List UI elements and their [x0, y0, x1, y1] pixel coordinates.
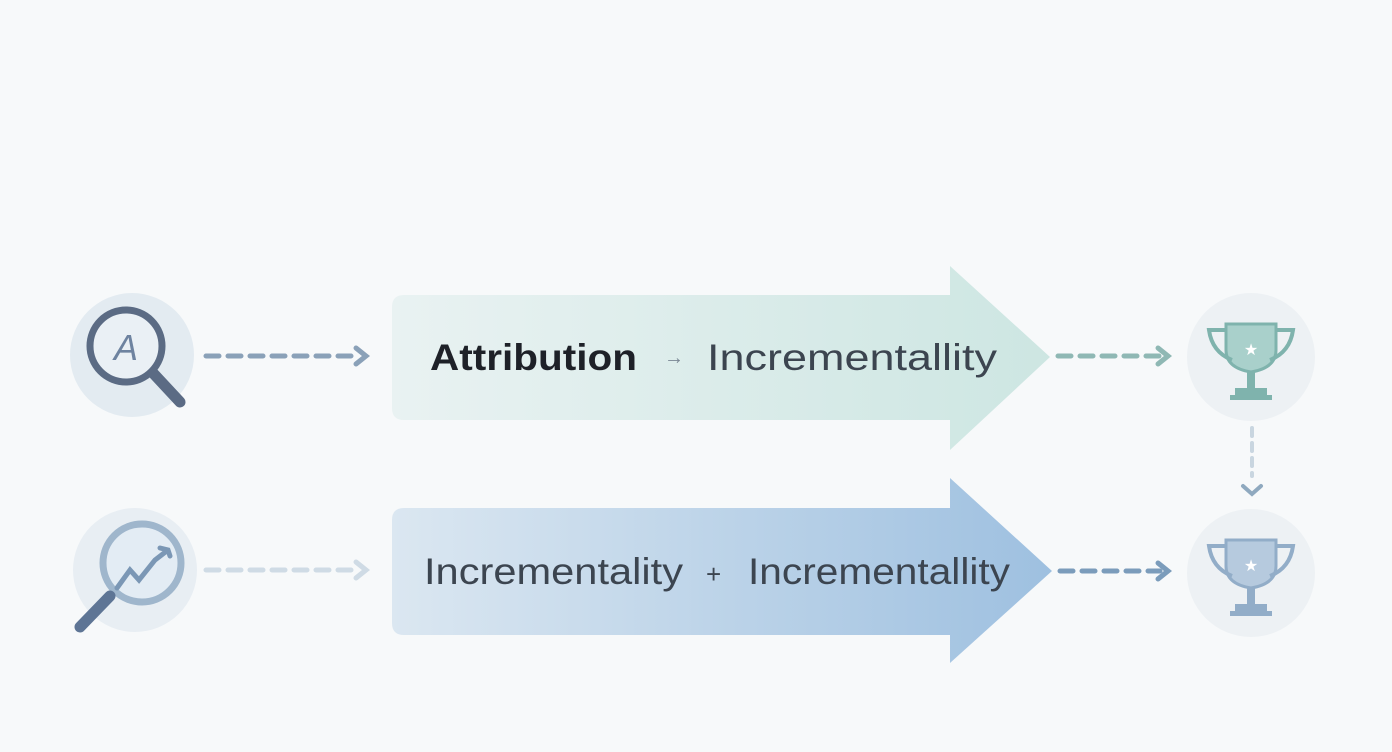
big arrow: attribution to incrementality	[392, 266, 1050, 450]
icon: attribution magnifier: A	[112, 327, 138, 368]
icon: attribution magnifier	[70, 293, 194, 417]
icon: trophy bottom: ★	[1244, 558, 1258, 575]
big arrow: attribution to incrementality: Attribution	[430, 337, 637, 378]
arrow: dashed bottom left	[206, 562, 366, 578]
icon: trophy top	[1187, 293, 1315, 421]
big arrow: attribution to incrementality: →	[664, 347, 684, 369]
big arrow: incrementality plus incrementality: Incrementallity	[748, 551, 1011, 592]
arrow: dashed bottom right	[1060, 563, 1168, 579]
arrow: dashed top right	[1058, 348, 1168, 364]
big arrow: incrementality plus incrementality: +	[706, 559, 721, 589]
icon: incrementality magnifier	[73, 508, 197, 632]
big arrow: incrementality plus incrementality	[392, 478, 1052, 663]
arrow: dashed top left	[206, 348, 366, 364]
icon: trophy bottom	[1187, 509, 1315, 637]
big arrow: attribution to incrementality: Incrementallity	[707, 337, 998, 378]
icon: trophy top: ★	[1244, 342, 1258, 359]
big arrow: incrementality plus incrementality: Incrementality	[424, 551, 684, 592]
arrow: dashed vertical	[1243, 428, 1261, 494]
